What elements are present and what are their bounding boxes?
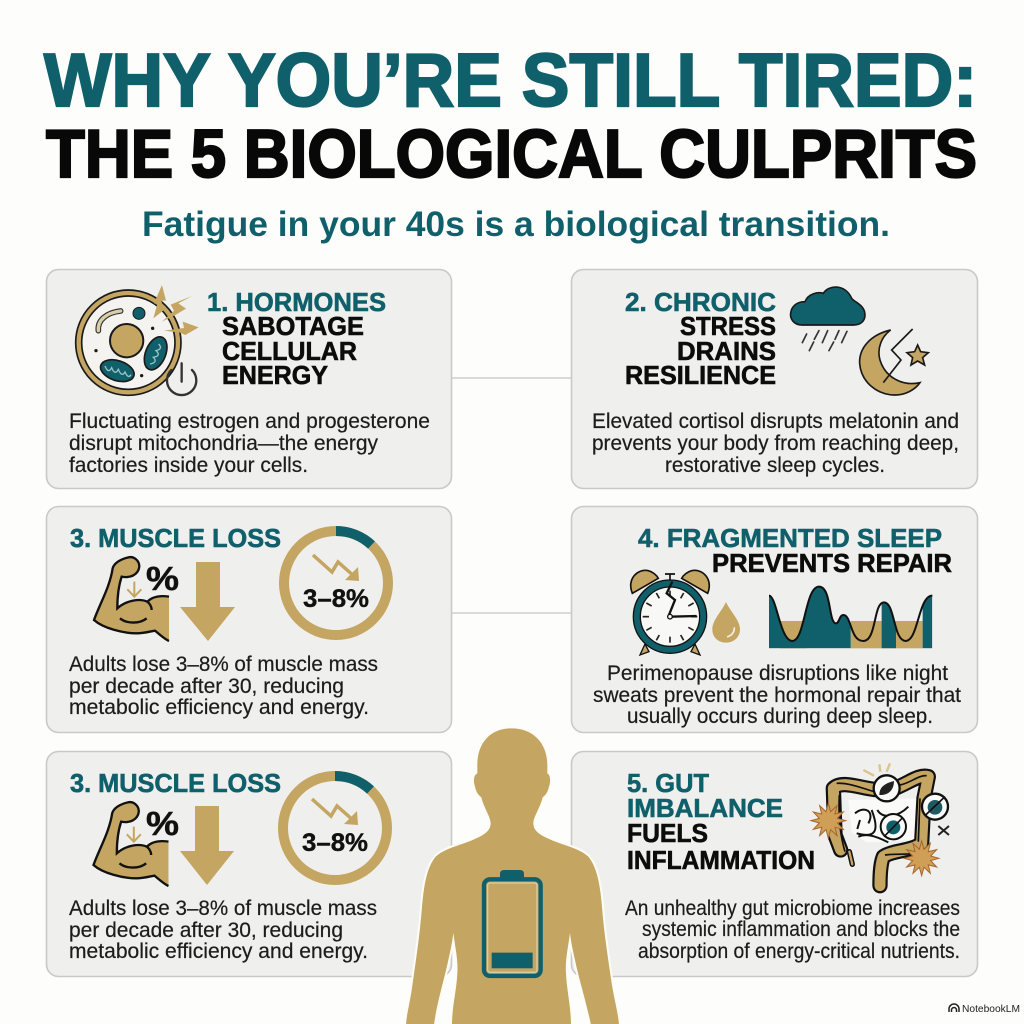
text: stress description — [592, 410, 959, 477]
text: stress description: Elevated cortisol disrupts melatonin and — [592, 410, 959, 433]
heading: hormones — [207, 287, 386, 390]
chart: donut 3–8% repeated — [283, 776, 387, 880]
text: hormones description: Fluctuating estrogen and progesterone — [69, 410, 430, 433]
text: stress description: prevents your body from reaching deep, — [592, 432, 959, 455]
text: muscle loss description — [69, 653, 378, 719]
chart: sleep wave — [769, 586, 932, 648]
chart: donut 3–8% — [284, 531, 388, 635]
panel: fragmented sleep — [572, 506, 978, 732]
icon: cracked moon and star — [860, 329, 928, 395]
heading: gut imbalance: FUELS — [627, 818, 708, 848]
text: muscle loss description repeated: Adults lose 3–8% of muscle mass — [69, 897, 377, 920]
text: gut description — [625, 897, 960, 963]
text: hormones description: factories inside your cells. — [69, 454, 308, 477]
heading: gut imbalance — [627, 768, 815, 875]
title — [44, 38, 977, 192]
panel: gut imbalance — [572, 752, 978, 976]
heading: muscle loss repeated: 3. MUSCLE LOSS — [70, 768, 281, 798]
heading: hormones: CELLULAR — [222, 336, 357, 366]
subtitle: Fatigue in your 40s is a biological transition. — [142, 205, 890, 244]
chart: donut 3–8%: 3–8% — [303, 585, 369, 613]
heading: chronic stress — [625, 287, 776, 390]
heading: hormones: SABOTAGE — [222, 311, 364, 341]
text: sleep description: usually occurs during deep sleep. — [627, 705, 933, 728]
heading: chronic stress: 2. CHRONIC — [625, 287, 776, 317]
heading: muscle loss: 3. MUSCLE LOSS — [70, 523, 281, 553]
icon: cell with lightning and power symbol — [76, 285, 199, 395]
panel: chronic stress — [572, 270, 978, 488]
heading: hormones: ENERGY — [222, 360, 328, 390]
heading: fragmented sleep: 4. FRAGMENTED SLEEP — [638, 523, 942, 553]
text: muscle loss description repeated — [69, 897, 377, 963]
figure: body silhouette with low battery — [406, 728, 619, 1024]
text: muscle loss description: per decade after 30, reducing — [69, 675, 344, 698]
icon: percent sign repeated: % — [146, 805, 179, 842]
title: WHY YOU’RE STILL TIRED: — [44, 38, 977, 122]
icon: sweat drop — [712, 602, 740, 643]
icon: percent sign: % — [146, 560, 179, 597]
icon: rain cloud — [791, 287, 865, 351]
icon: flexed arm repeated — [93, 802, 168, 886]
heading: gut imbalance: INFLAMMATION — [627, 845, 815, 875]
text: muscle loss description repeated: per decade after 30, reducing — [69, 919, 343, 942]
icon: down arrow — [180, 562, 235, 641]
text: gut description: absorption of energy-critical nutrients. — [638, 940, 960, 963]
icon: inflamed intestine — [811, 763, 949, 886]
text: stress description: restorative sleep cycles. — [665, 454, 885, 477]
panel: muscle loss repeated — [46, 752, 452, 976]
text: sleep description: Perimenopause disruptions like night — [607, 662, 948, 685]
icon: cracked alarm clock — [631, 570, 709, 655]
text: muscle loss description: Adults lose 3–8% of muscle mass — [69, 653, 378, 676]
text: gut description: An unhealthy gut microbiome increases — [625, 897, 960, 920]
panel: hormones — [46, 270, 452, 488]
title: THE 5 BIOLOGICAL CULPRITS — [46, 116, 977, 192]
text: muscle loss description repeated: metabolic efficiency and energy. — [69, 940, 368, 963]
logo: NotebookLM: NotebookLM — [962, 1003, 1020, 1015]
heading: fragmented sleep — [638, 523, 952, 578]
heading: fragmented sleep: PREVENTS REPAIR — [712, 548, 952, 578]
heading: chronic stress: STRESS — [680, 311, 776, 341]
text: hormones description — [69, 410, 430, 477]
text: hormones description: disrupt mitochondria—the energy — [69, 432, 378, 455]
text: sleep description: sweats prevent the hormonal repair that — [593, 684, 961, 707]
heading: gut imbalance: IMBALANCE — [627, 793, 783, 823]
heading: hormones: 1. HORMONES — [207, 287, 386, 317]
icon: low battery — [484, 870, 541, 976]
heading: chronic stress: RESILIENCE — [625, 360, 776, 390]
text: gut description: systemic inflammation and blocks the — [642, 918, 960, 941]
heading: gut imbalance: 5. GUT — [627, 768, 709, 798]
heading: chronic stress: DRAINS — [677, 336, 776, 366]
chart: donut 3–8% repeated: 3–8% — [302, 829, 368, 857]
text: sleep description — [593, 662, 961, 728]
panel: muscle loss — [46, 506, 452, 732]
text: muscle loss description: metabolic efficiency and energy. — [69, 696, 369, 719]
icon: down arrow repeated — [180, 806, 234, 885]
icon: flexed arm — [94, 557, 169, 641]
